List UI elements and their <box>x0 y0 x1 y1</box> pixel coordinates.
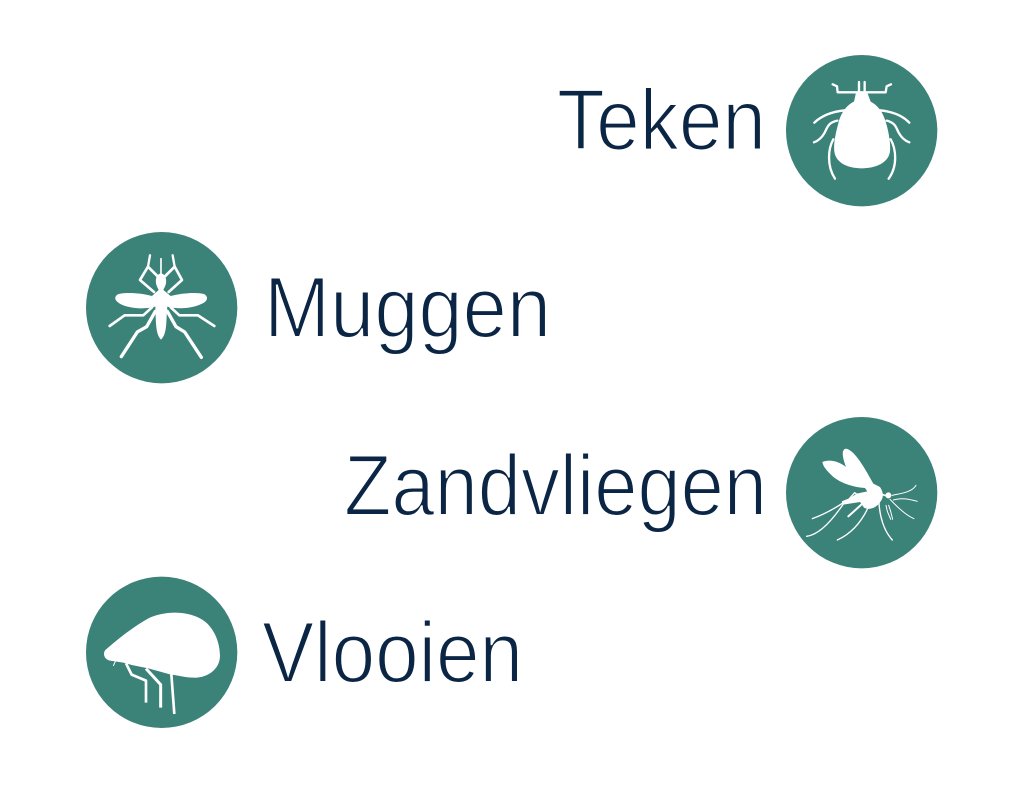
row: Vlooien <box>86 577 523 728</box>
label: Muggen: Muggen <box>264 260 551 356</box>
row: Muggen <box>86 232 551 383</box>
row: Zandvliegen <box>344 417 937 568</box>
icon: sandfly <box>786 417 937 568</box>
row: Teken <box>557 55 937 206</box>
icon: mosquito <box>86 232 237 383</box>
label: Zandvliegen: Zandvliegen <box>344 438 767 534</box>
icon: flea <box>86 577 237 728</box>
label: Vlooien: Vlooien <box>262 605 523 701</box>
label: Teken: Teken <box>557 72 766 168</box>
icon: tick <box>786 55 937 206</box>
